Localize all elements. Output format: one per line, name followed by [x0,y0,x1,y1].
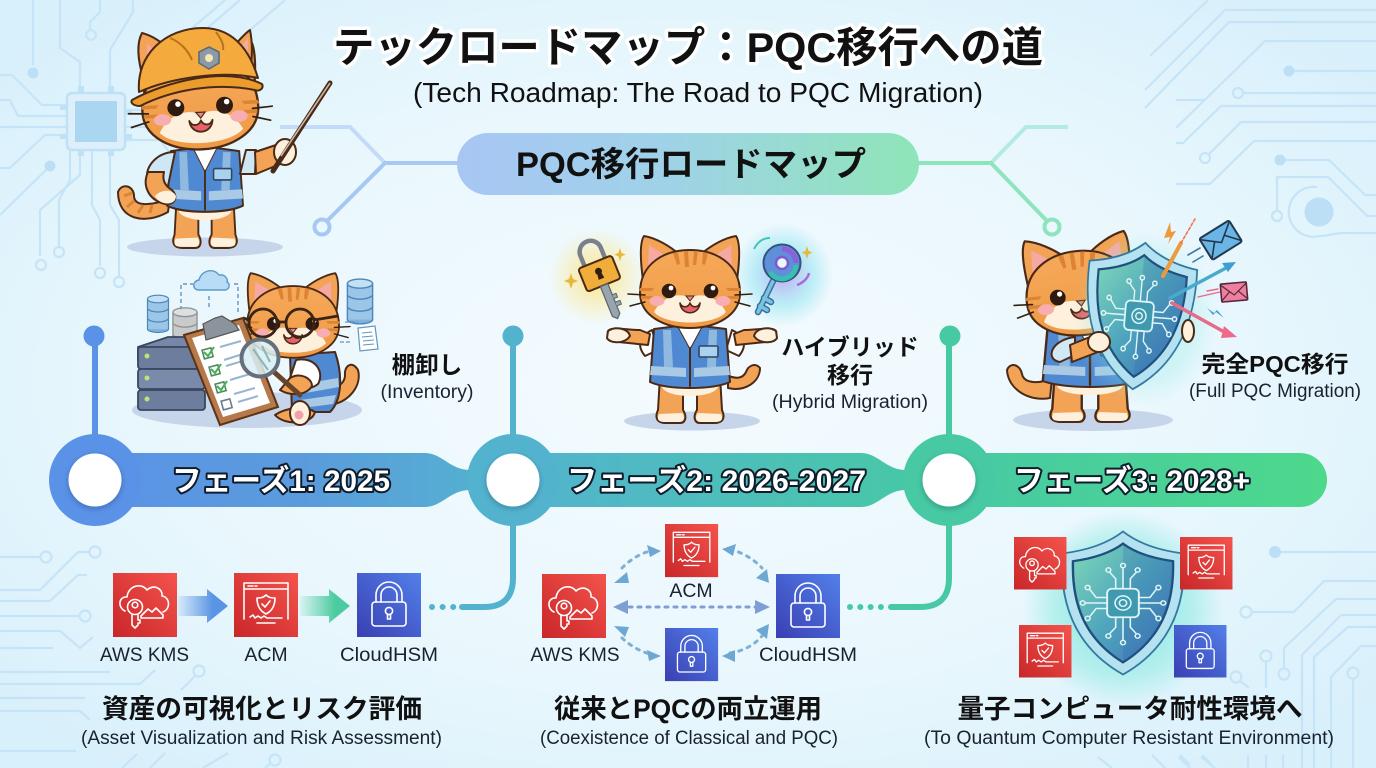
circuit pattern: top left [0,0,285,287]
cat head [1008,229,1151,342]
cat arm [1052,320,1194,362]
icon: lock small [665,628,718,681]
icon: circuit chip [60,86,132,156]
stem: phase 3 [940,326,960,440]
icon: lock [1174,625,1226,677]
arrows: bidirectional dotted [613,544,770,662]
cat body [1043,325,1137,422]
label: phase 3: フェーズ3: 2028+ [1014,464,1250,498]
service labels: ACM [669,580,713,602]
title [333,24,1043,108]
service labels [530,580,857,666]
circuit pattern: bottom right [1098,546,1376,768]
sparkles [564,246,813,289]
label: hybrid migration: ハイブリッド [781,334,919,360]
caption: 量子コンピュータ耐性環境へ [958,694,1302,724]
cat tail [325,365,359,405]
icon: AWS KMS [113,573,177,637]
icon: ACM left [1019,625,1071,677]
node: phase 1 [49,434,141,526]
label: phase 1: フェーズ1: 2025 [172,464,390,498]
icon: KMS [1014,537,1066,589]
icon: lightning [1164,222,1176,244]
node: phase 2 [467,434,559,526]
icon: quantum shield [1062,532,1184,674]
caption: 資産の可視化とリスク評価 [102,694,422,724]
connector: phase 2 down to services [432,522,513,607]
title: テックロードマップ：PQC移行への道 [333,24,1043,71]
heading pill: PQC移行ロードマップ [457,133,919,195]
bar [95,453,1327,507]
service labels [100,644,438,666]
service labels: CloudHSM [759,644,857,666]
label: full PQC migration: 完全PQC移行 [1202,351,1348,377]
icon: cloud with dashed links [181,271,238,312]
phase 1: inventory illustration [132,271,378,428]
node: phase 3 [903,434,995,526]
title: (Tech Roadmap: The Road to PQC Migration) [413,77,983,108]
icon: CloudHSM [357,573,421,637]
circuit pattern: bottom left [0,546,280,768]
label: full PQC migration [1189,351,1361,402]
shield glow [1073,230,1217,406]
caption english: (To Quantum Computer Resistant Environment) [924,728,1334,749]
label: inventory: 棚卸し [392,352,462,378]
shield glow [1023,510,1223,706]
icon: quantum shield [1079,238,1199,394]
label: full PQC migration: (Full PQC Migration) [1189,381,1361,402]
panel: phase 1 services [81,573,442,749]
panel: phase 2 services [530,524,857,749]
connector lines from roadmap pill [280,127,1068,234]
panel: phase 3 services [924,510,1334,749]
mascot: engineer cat with hard hat and pointer [118,28,330,256]
label: inventory: (Inventory) [380,382,474,403]
glow: quantum key [733,223,833,327]
icon: quantum swirl key [754,238,809,312]
cat body [650,326,730,423]
icon: pink envelope [1220,282,1248,302]
icon: ACM small [665,524,718,577]
caption: 従来とPQCの両立運用 [554,694,822,724]
stem: phase 2 [502,326,524,440]
icon: magnifying glass [242,340,300,395]
icon: classical padlock key [570,235,634,325]
phase 3: cat holding quantum shield [1007,219,1248,431]
cat tail [1007,365,1052,399]
service labels: ACM [244,644,288,666]
service labels: CloudHSM [340,644,438,666]
glow: classical key [549,229,645,325]
label: hybrid migration: (Hybrid Migration) [772,392,928,413]
cat head [628,236,752,328]
connector: phase 3 down to services [850,522,949,607]
icon: document [340,322,378,351]
icon: ACM right [1180,537,1232,589]
icon: ACM [234,573,298,637]
phase 2: hybrid migration cat with two keys [549,223,833,430]
icon: glasses [243,309,338,337]
icon: database blue left [148,295,168,332]
caption english: (Asset Visualization and Risk Assessment) [81,728,442,749]
cat arms [607,328,777,356]
icon: attack arrows [1163,219,1228,334]
label: hybrid migration [772,334,928,413]
service labels: AWS KMS [530,644,620,666]
label: phase 2: フェーズ2: 2026-2027 [567,464,866,498]
arrow: ACM to CloudHSM [300,589,350,623]
icon: clipboard checklist [184,316,278,425]
icon: database gray [173,308,197,351]
heading pill: PQC移行ロードマップ: PQC移行ロードマップ [516,146,866,184]
icon: database blue right [347,279,373,324]
cat tail [728,365,760,389]
arrow: KMS to ACM [178,589,228,623]
icon: CloudHSM [776,574,840,638]
cat body [290,352,340,412]
circuit pattern: top right [1145,0,1376,237]
label: hybrid migration: 移行 [827,362,873,388]
caption english: (Coexistence of Classical and PQC) [540,728,838,749]
service labels: AWS KMS [100,644,189,666]
icon: AWS KMS [542,574,606,638]
timeline bar with phase nodes [49,326,1327,526]
icon: blue envelope [1199,220,1242,260]
label: inventory [380,352,474,403]
stem: phase 1 [84,326,104,440]
icon: server stack [138,337,205,410]
cat head [236,273,350,358]
